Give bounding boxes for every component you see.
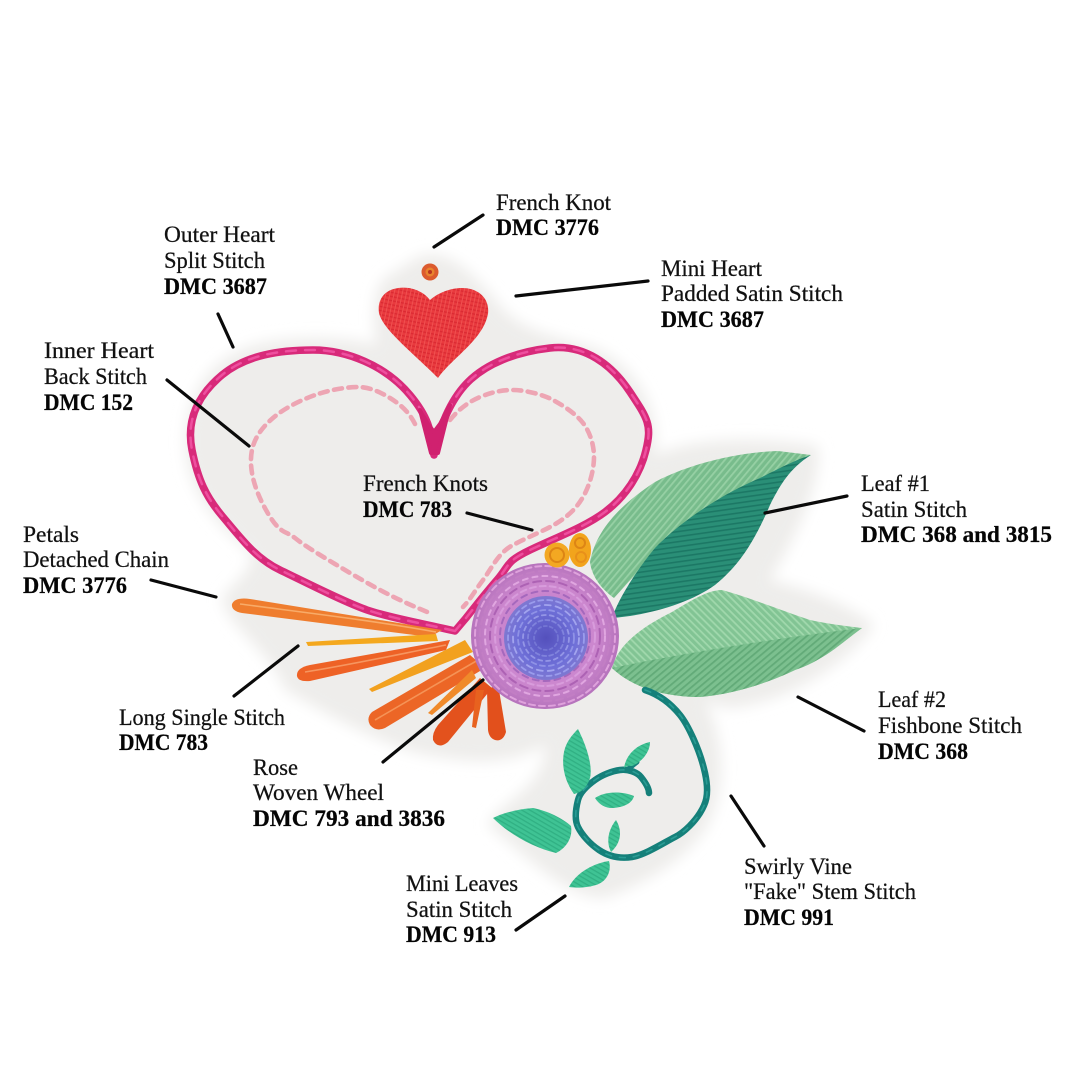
label: outer heart: Outer Heart	[164, 222, 276, 247]
petals: long single stitch	[232, 599, 506, 746]
label: inner heart: DMC 152	[44, 390, 133, 415]
label: french knot: French Knot	[496, 190, 612, 215]
label: french knot	[434, 190, 612, 247]
icon: french knots cluster	[544, 533, 591, 568]
label: outer heart: DMC 3687	[164, 274, 267, 299]
label: mini leaves	[406, 871, 565, 947]
outer heart	[190, 348, 649, 631]
label: petals: Petals	[23, 522, 79, 547]
label: rose	[253, 680, 483, 831]
label: french knot: DMC 3776	[496, 215, 599, 240]
label: leaf 2	[798, 687, 1022, 764]
mini leaves	[493, 729, 650, 888]
label: mini leaves: Mini Leaves	[406, 871, 518, 896]
label: leaf 2: Fishbone Stitch	[878, 713, 1022, 738]
label: swirly vine: "Fake" Stem Stitch	[744, 879, 916, 904]
label: leaf 2: DMC 368	[878, 739, 968, 764]
label: rose: Woven Wheel	[253, 780, 384, 805]
icon: single french knot	[422, 264, 438, 280]
leaf 1 dark half	[612, 455, 811, 618]
label: french knots: DMC 783	[363, 497, 452, 522]
leaf 2: fishbone stitch	[612, 590, 862, 697]
label: inner heart	[44, 338, 249, 446]
leaf 1 light half	[590, 451, 811, 598]
leaf 1: satin stitch	[590, 451, 811, 618]
label: leaf 2: Leaf #2	[878, 687, 946, 712]
label: mini heart: DMC 3687	[661, 307, 764, 332]
label: leaf 1: DMC 368 and 3815	[861, 522, 1052, 547]
label: mini leaves: DMC 913	[406, 922, 496, 947]
label: outer heart	[164, 222, 276, 347]
label: french knots: French Knots	[363, 471, 488, 496]
swirly vine	[576, 690, 707, 858]
label: swirly vine: DMC 991	[744, 905, 834, 930]
label: rose: DMC 793 and 3836	[253, 806, 445, 831]
inner heart	[251, 387, 594, 614]
label: leaf 1: Leaf #1	[861, 471, 930, 496]
label: leaf 1: Satin Stitch	[861, 497, 967, 522]
label: swirly vine: Swirly Vine	[744, 854, 852, 879]
label: petals: Detached Chain	[23, 547, 169, 572]
label: mini heart: Mini Heart	[661, 256, 763, 281]
label: mini heart: Padded Satin Stitch	[661, 281, 843, 306]
label: french knots	[363, 471, 532, 530]
rose: woven wheel	[471, 563, 619, 709]
label: petals	[23, 522, 216, 598]
label: inner heart: Back Stitch	[44, 364, 147, 389]
label: outer heart: Split Stitch	[164, 248, 265, 273]
fabric cutout	[185, 254, 874, 898]
label: mini leaves: Satin Stitch	[406, 897, 512, 922]
label: inner heart: Inner Heart	[44, 338, 155, 363]
label: leaf 1	[765, 471, 1052, 547]
label: long single stitch: DMC 783	[119, 730, 208, 755]
label: petals: DMC 3776	[23, 573, 127, 598]
label: long single stitch: Long Single Stitch	[119, 705, 285, 730]
label: long single stitch	[119, 646, 298, 755]
label: rose: Rose	[253, 755, 298, 780]
label: swirly vine	[731, 796, 916, 930]
icon: mini heart	[379, 288, 488, 378]
label: mini heart	[516, 256, 843, 332]
illustration: embroidery	[190, 264, 862, 888]
